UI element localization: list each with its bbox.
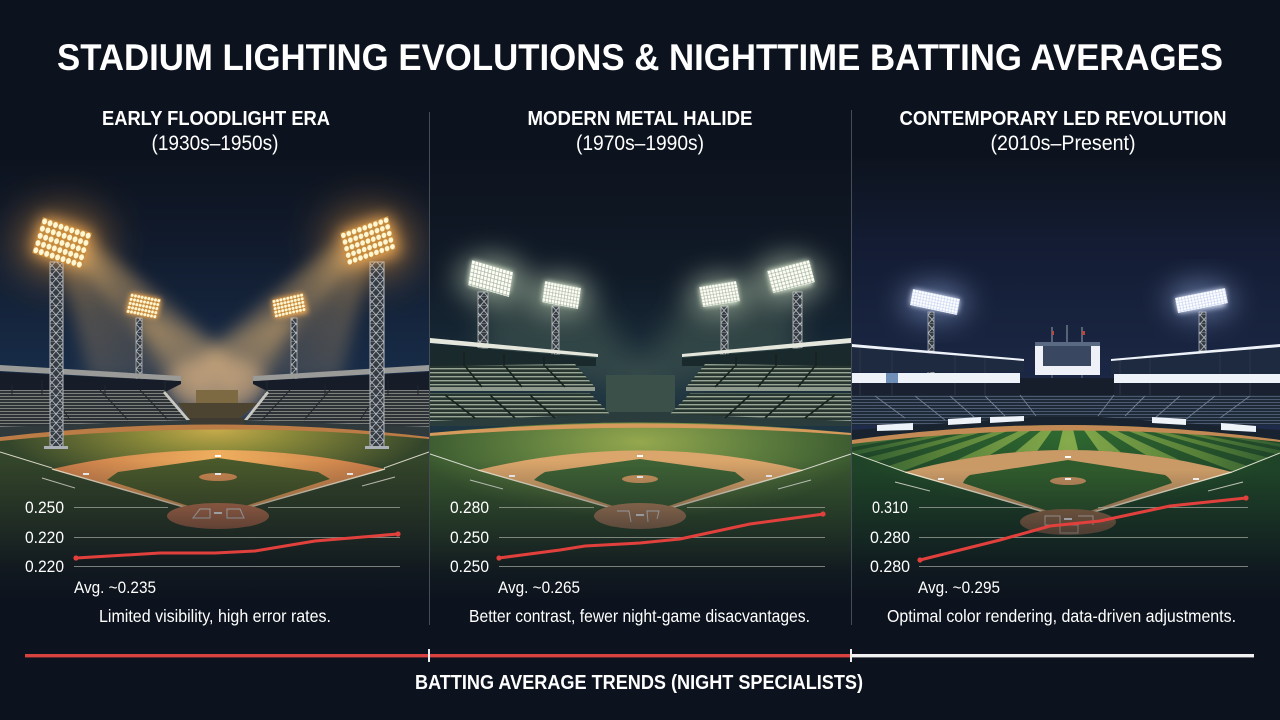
chart: LED era batting average: 0.310: [872, 499, 908, 517]
large light towers: [32, 216, 400, 449]
average label: Avg. ~0.265: [498, 578, 580, 597]
caption: Limited visibility, high error rates.: [99, 606, 331, 626]
heading: modern metal halide: MODERN METAL HALIDE: [528, 108, 752, 130]
chart: metal halide batting average: 0.250: [450, 529, 489, 547]
light towers: [906, 284, 1230, 373]
outfield grass with mowing stripes: [852, 425, 1280, 566]
average label: Avg. ~0.295: [918, 578, 1000, 597]
infield: [52, 450, 385, 529]
trend line: [496, 511, 826, 561]
stadium illustration: early era: [0, 183, 429, 564]
scoreboard and flags: [1035, 325, 1100, 378]
chart: early era batting average: 0.220: [25, 558, 64, 576]
trend line: [917, 495, 1249, 563]
chart: LED era batting average: 0.280: [870, 558, 910, 576]
title: STADIUM LIGHTING EVOLUTIONS & NIGHTTIME BATTING AVERAGES: [57, 37, 1223, 78]
stands and roof: [0, 365, 429, 436]
chart: early era batting average: 0.220: [25, 529, 64, 547]
heading: contemporary LED revolution: (2010s–Present): [990, 132, 1136, 155]
infield: [478, 450, 803, 529]
chart: LED era batting average: 0.280: [870, 529, 910, 547]
heading: early floodlight era: (1930s–1950s): [152, 132, 278, 155]
panel: modern metal halide: [430, 108, 851, 626]
heading: early floodlight era: [102, 108, 330, 155]
heading: modern metal halide: (1970s–1990s): [576, 132, 704, 155]
panel: early floodlight era: [0, 108, 429, 626]
heading: early floodlight era: EARLY FLOODLIGHT ERA: [102, 108, 330, 130]
caption: Better contrast, fewer night-game disacvantages.: [469, 606, 810, 626]
chart: metal halide batting average: 0.280: [450, 499, 489, 517]
chart: metal halide batting average: 0.250: [450, 558, 489, 576]
chart: LED era batting average: [870, 495, 1249, 576]
timeline label: BATTING AVERAGE TRENDS (NIGHT SPECIALISTS): [415, 672, 863, 694]
timeline bar: [25, 649, 1254, 662]
trend line: [73, 531, 401, 561]
chart: early era batting average: 0.250: [25, 499, 64, 517]
stadium illustration: metal halide era: [430, 232, 851, 570]
light towers: [468, 260, 815, 356]
small light towers: [126, 293, 308, 396]
heading: modern metal halide: [528, 108, 752, 155]
heading: contemporary LED revolution: [900, 108, 1226, 155]
heading: contemporary LED revolution: CONTEMPORARY LED REVOLUTION: [900, 108, 1226, 130]
infield: [905, 450, 1232, 535]
chart: metal halide batting average: [450, 499, 826, 576]
average label: Avg. ~0.235: [74, 578, 156, 597]
stands and scoreboard: [430, 338, 851, 426]
caption: Optimal color rendering, data-driven adjustments.: [887, 606, 1236, 626]
stadium illustration: LED era: [852, 190, 1280, 566]
chart: early era batting average: [25, 499, 401, 576]
panel: contemporary LED revolution: [852, 111, 1280, 626]
stands and roof: [852, 344, 1280, 440]
outfield grass: [430, 422, 851, 570]
outfield grass: [0, 430, 429, 564]
